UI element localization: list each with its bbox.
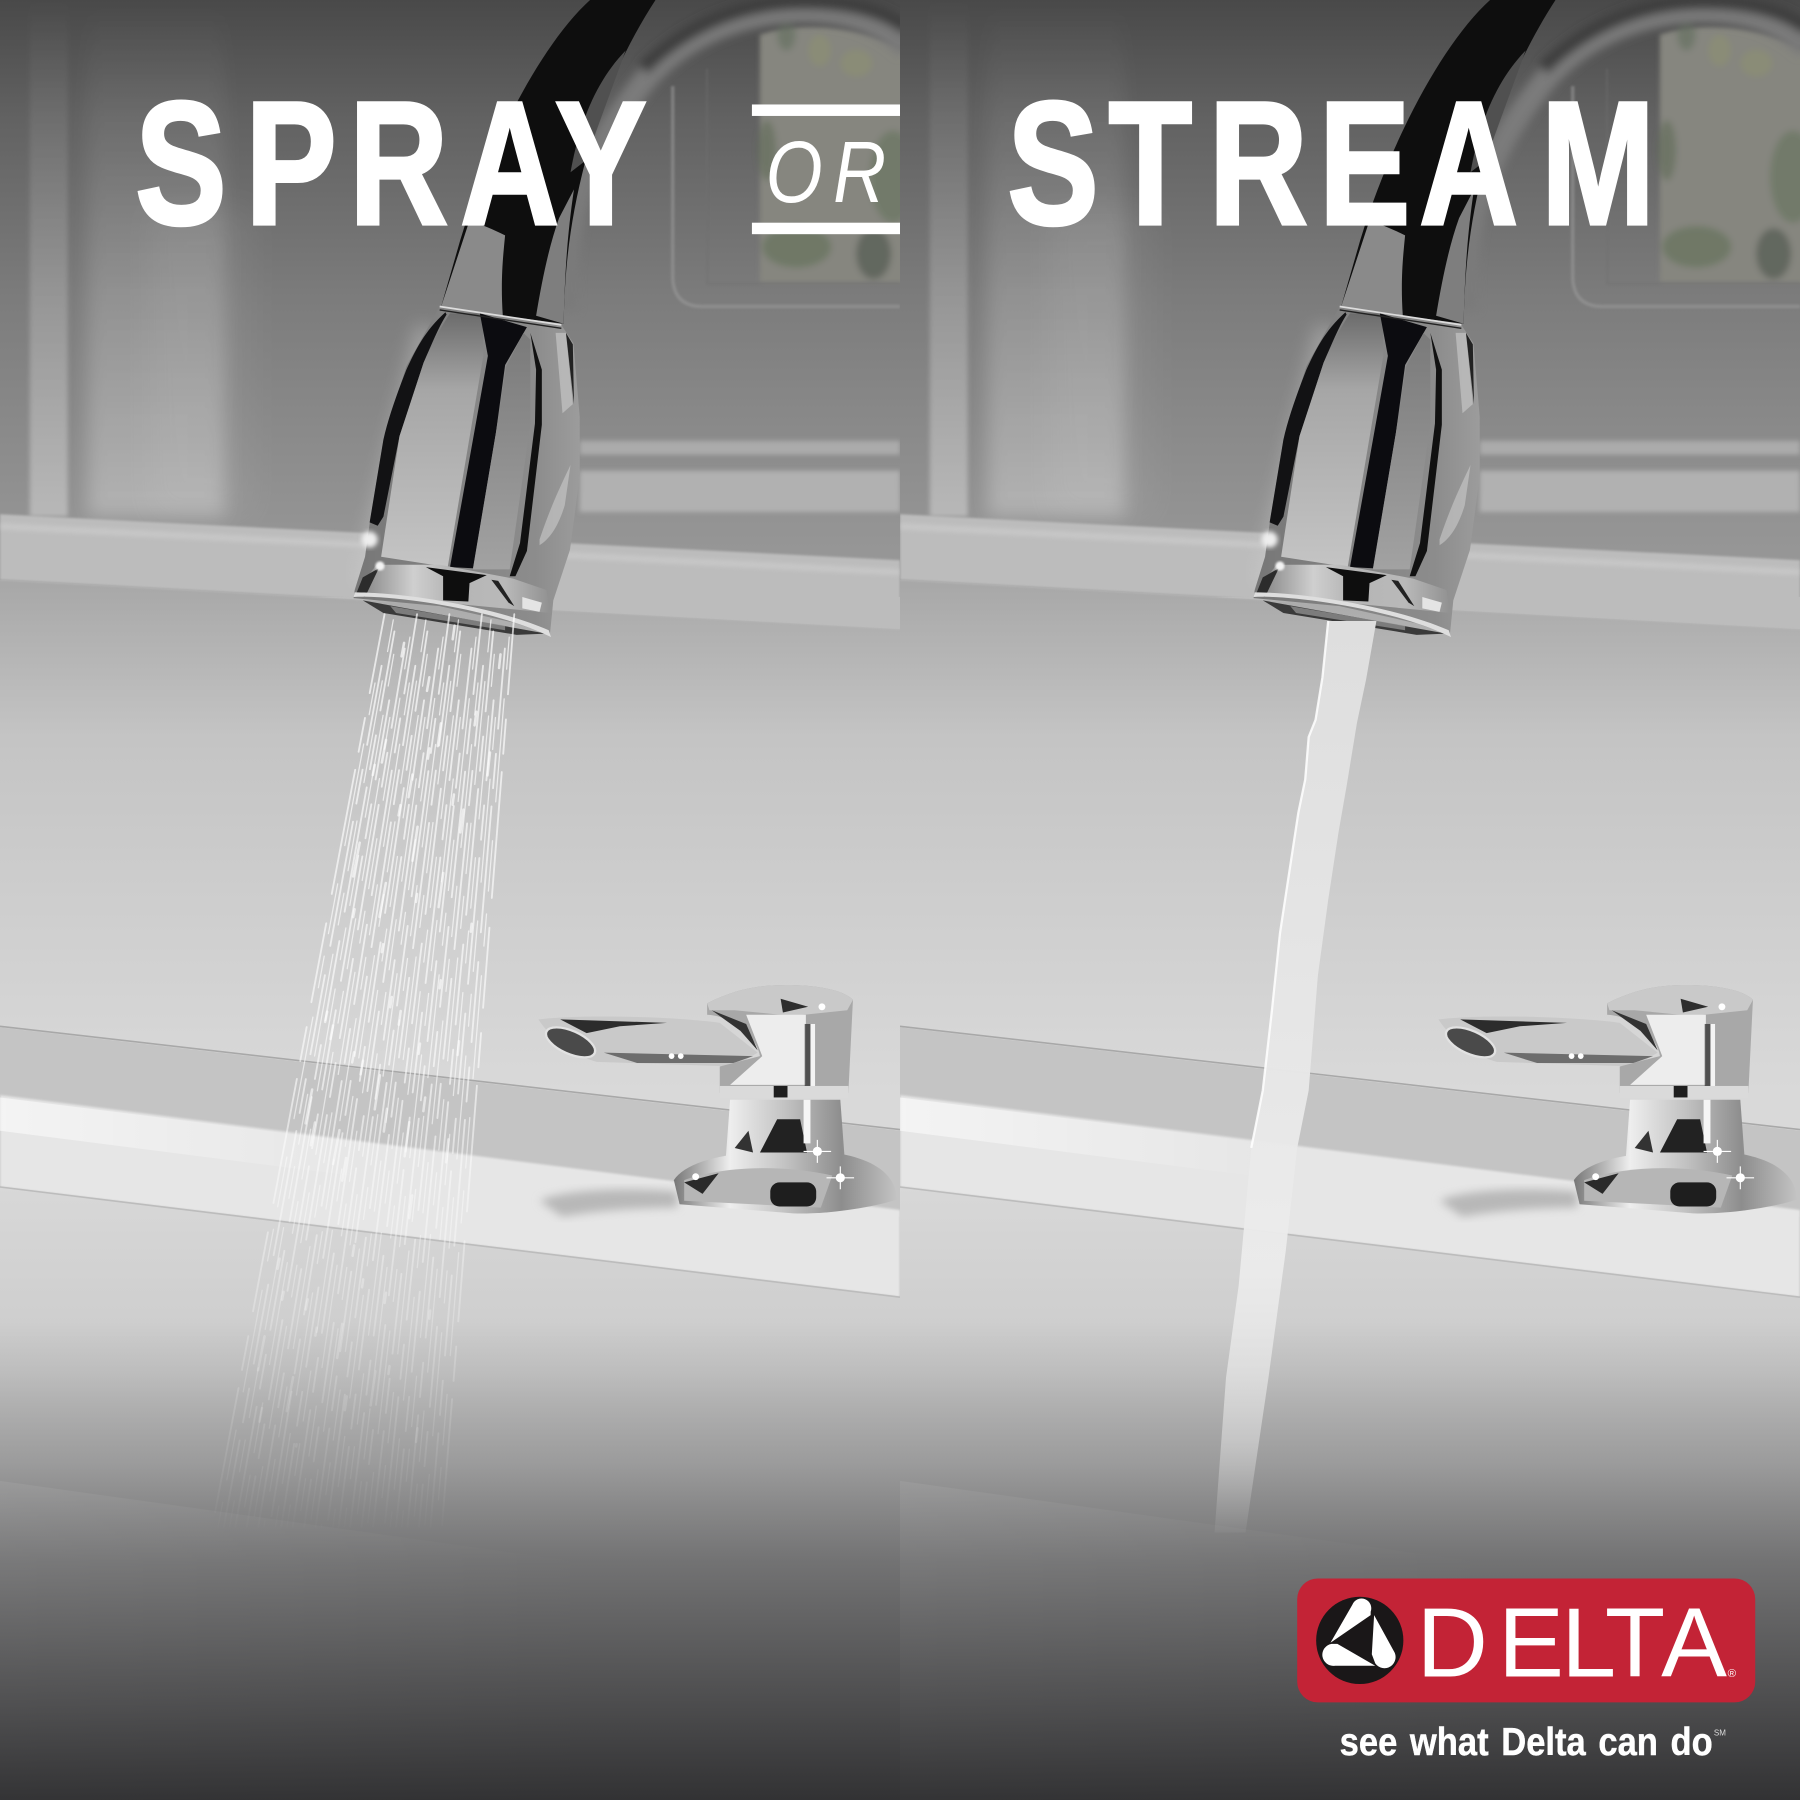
panel: stream (right half) xyxy=(900,0,1800,1800)
soap dispenser xyxy=(538,985,897,1217)
background scene: wall, counter and sink with faucet xyxy=(0,0,916,1800)
head thin black reflection xyxy=(510,333,542,576)
logo wordmark: DELTA xyxy=(1417,1588,1727,1698)
head highlights xyxy=(362,532,378,548)
logo red badge xyxy=(1297,1578,1755,1702)
background scene repeated for the stream side xyxy=(900,0,1800,1800)
faucet neck xyxy=(441,0,655,324)
wall paneling strips xyxy=(30,0,68,517)
ledge and lower wall xyxy=(0,580,900,1148)
faucet spray head xyxy=(354,307,580,637)
dispenser shadow xyxy=(540,1189,677,1217)
divider label: OR with rules: OR xyxy=(766,124,886,222)
registered mark: ® xyxy=(1728,1668,1737,1680)
counter edge xyxy=(0,1095,900,1297)
brand logo: Delta xyxy=(1297,1578,1755,1702)
tagline: see what Delta can do xyxy=(1340,1721,1713,1764)
bottom dark vignette xyxy=(0,1320,900,1800)
window frame mouldings xyxy=(673,69,900,307)
head left black reflection xyxy=(370,312,447,526)
head base ring xyxy=(359,565,550,613)
heading: STREAM: STREAM xyxy=(1007,66,1655,262)
water spray from faucet xyxy=(212,614,514,1527)
head main black reflection xyxy=(450,313,527,568)
dispenser spout xyxy=(538,1016,758,1066)
head right detail xyxy=(556,333,573,413)
divider label: OR with rules xyxy=(752,104,900,234)
heading: SPRAY: SPRAY xyxy=(135,66,647,262)
panel: spray (left half) xyxy=(0,0,916,1800)
counter back line xyxy=(0,1026,900,1130)
window glass with foliage xyxy=(758,18,916,282)
head mid highlight xyxy=(473,333,530,569)
logo circle with triangle mark xyxy=(1316,1597,1403,1684)
dispenser base xyxy=(674,1153,897,1214)
reflected faucet arc xyxy=(566,2,907,311)
dispenser body xyxy=(707,985,853,1093)
sink lower rim xyxy=(0,1481,900,1800)
head left highlight xyxy=(381,313,483,567)
soft glow around the faucet head xyxy=(365,327,427,585)
service mark: SM xyxy=(1714,1729,1726,1738)
dispenser stem xyxy=(726,1100,845,1162)
window sill strips xyxy=(580,441,900,512)
sink basin xyxy=(0,1187,900,1800)
head underside rim xyxy=(363,600,546,635)
solid water stream from faucet xyxy=(1215,621,1376,1533)
upper wall xyxy=(0,0,900,597)
